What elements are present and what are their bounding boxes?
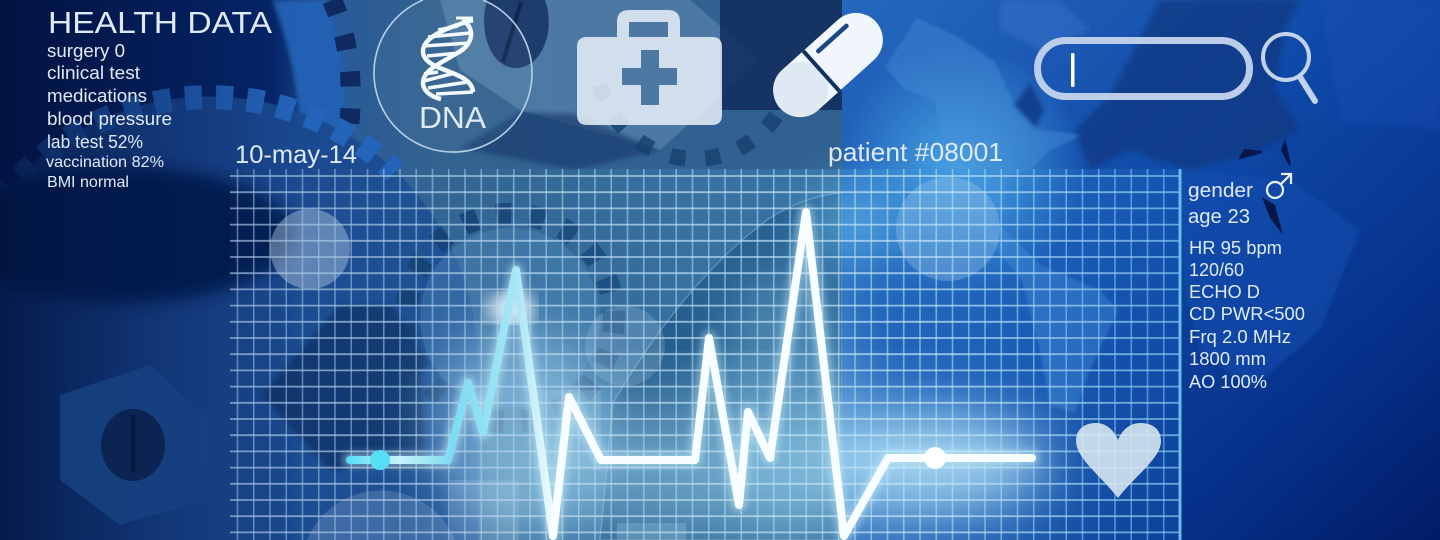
text block: patient details: 1800 mm <box>1189 349 1266 369</box>
text block: health data: surgery 0 <box>47 40 125 61</box>
background: left shading <box>0 0 300 540</box>
text block: patient details: gender <box>1188 180 1253 202</box>
gear: upper band with notches <box>272 0 351 135</box>
dark key shape in grid <box>262 305 425 470</box>
map: north america <box>885 18 1118 413</box>
icon: heart <box>1076 423 1161 498</box>
arc wedge <box>600 193 842 540</box>
text block: patient details: CD PWR<500 <box>1189 304 1305 324</box>
map: dark lands and seas <box>1000 0 1440 390</box>
text block: patient details: Frq 2.0 MHz <box>1189 327 1291 347</box>
patient label: patient #08001 <box>828 137 1003 167</box>
icon: search box <box>1038 40 1250 96</box>
map: dark top-left band <box>720 0 842 110</box>
icon: medical kit <box>577 10 722 125</box>
text block: health data: lab test 52% <box>47 132 143 152</box>
icon: pill <box>762 2 894 128</box>
glow: around trace <box>430 185 1050 535</box>
text block: patient details: HR 95 bpm <box>1189 238 1282 258</box>
text block: patient details: 120/60 <box>1189 260 1244 280</box>
text block: patient details: ECHO D <box>1189 282 1260 302</box>
chart: ECG trace <box>350 212 1032 536</box>
text block: patient details <box>1188 180 1305 392</box>
gear: teeth under the kit <box>600 85 790 159</box>
dot: trace end <box>924 447 946 469</box>
icon: magnifying glass <box>1263 34 1315 101</box>
text block: health data: BMI normal <box>47 174 129 191</box>
gear: mid grid teeth <box>406 214 614 422</box>
text block: health data: medications <box>47 85 147 106</box>
nut: lower left bolt <box>60 365 210 525</box>
dot: trace start <box>370 450 390 470</box>
text block: health data <box>46 5 272 191</box>
chart: monitor grid <box>230 169 1180 540</box>
text block: health data: clinical test <box>47 62 140 83</box>
background: gears and nuts <box>0 0 842 540</box>
panel: world map <box>720 0 1440 540</box>
text block: health data: vaccination 82% <box>46 154 164 171</box>
date label: 10-may-14 <box>235 141 357 169</box>
text block: health data: blood pressure <box>47 108 172 129</box>
nut: top centre <box>440 0 760 170</box>
text block: patient details: AO 100% <box>1189 372 1267 392</box>
icon: male symbol <box>1267 174 1291 198</box>
icon: DNA in circle <box>374 0 532 152</box>
gear: large body lower left <box>0 97 478 540</box>
label: DNA: DNA <box>419 100 486 135</box>
circle: translucent discs <box>270 177 1000 540</box>
text block: patient details: age 23 <box>1188 206 1250 228</box>
heading: HEALTH DATA <box>48 5 272 40</box>
